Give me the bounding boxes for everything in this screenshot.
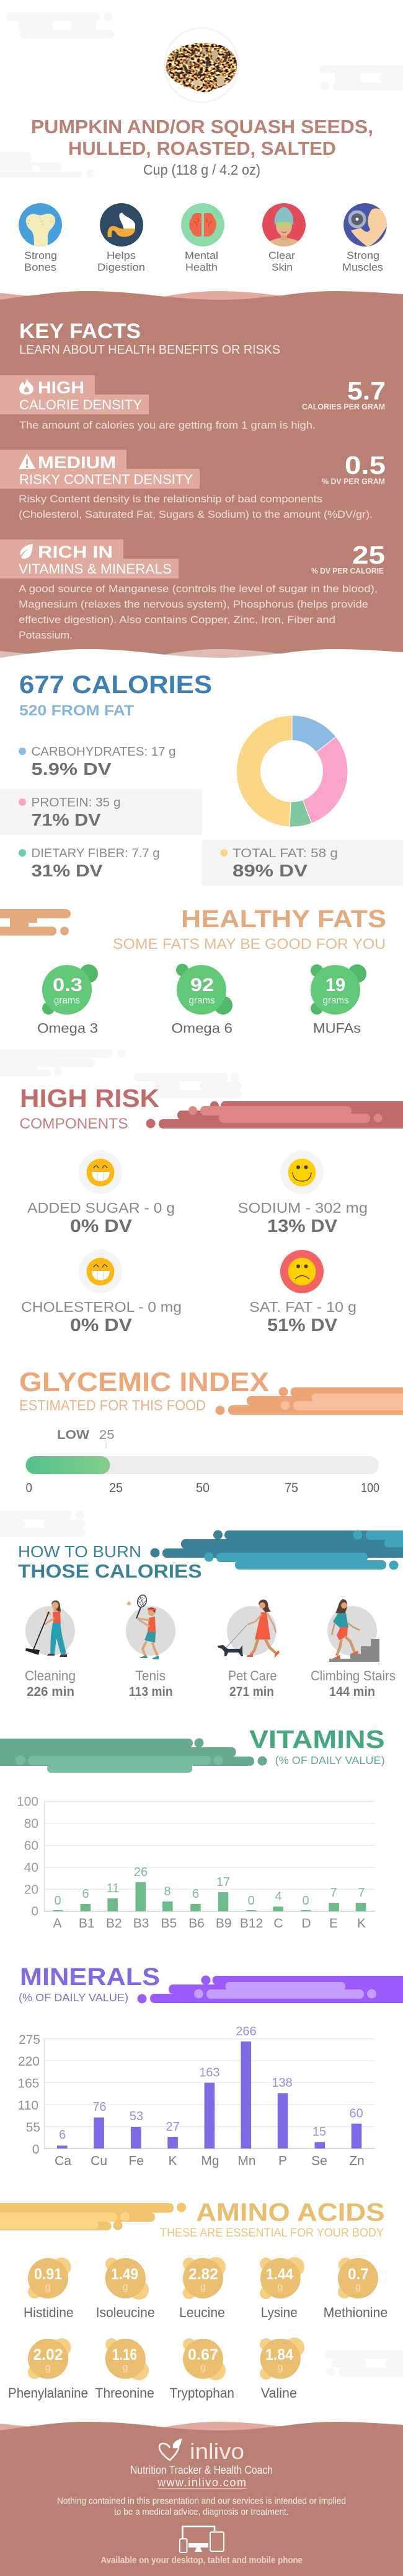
bar chart: minerals: 76	[92, 2100, 107, 2114]
bar chart: vitamins: 7	[358, 1886, 365, 1900]
bar chart: vitamins: B2	[106, 1916, 122, 1931]
stat: omega 6: Omega 6	[171, 1021, 232, 1036]
bar chart: minerals: Mn	[237, 2154, 256, 2168]
bar chart: vitamins: 0	[302, 1894, 309, 1908]
heading: how to burn those calories: THOSE CALORIES	[18, 1560, 202, 1582]
banner shape: purple	[138, 1976, 403, 2003]
heading: minerals	[19, 1963, 160, 2004]
tagline: Nutrition Tracker & Health Coach	[130, 2464, 273, 2476]
label: strong muscles: Muscles	[342, 261, 383, 273]
amino: valine: g	[278, 2362, 283, 2373]
bar chart: vitamins: 0	[54, 1894, 61, 1908]
bar chart: minerals: 163	[199, 2066, 220, 2080]
bar chart: minerals: K	[169, 2154, 177, 2168]
fact: high calorie density: HIGH	[38, 378, 84, 397]
food photo: seeds in ring	[162, 28, 241, 102]
serving size: Cup (118 g / 4.2 oz)	[143, 162, 260, 178]
disclaimer: Nothing contained in this presentation and our services is intended or implied	[57, 2497, 346, 2507]
icon: flame	[19, 378, 33, 395]
fact: medium risky content density: Risky Content density is the relationship of bad components	[19, 494, 322, 505]
heading: healthy fats: HEALTHY FATS	[181, 906, 386, 933]
gauge axis labels: 75	[285, 1481, 298, 1495]
item: sodium: 13% DV	[267, 1216, 338, 1236]
bar chart: vitamins: 80	[24, 1817, 38, 1831]
bar chart: vitamins: 4	[275, 1890, 282, 1903]
bar chart: minerals: Ca	[55, 2154, 71, 2168]
fact: high calorie density	[0, 375, 386, 431]
label: strong muscles: Strong	[347, 250, 379, 261]
bar chart: minerals: Cu	[91, 2154, 107, 2168]
legend: protein: 71% DV	[31, 810, 101, 829]
heading: key facts: KEY FACTS	[19, 320, 141, 343]
panel: high risk components	[20, 1084, 403, 1335]
bar chart: vitamins: K	[357, 1916, 366, 1931]
amino: isoleucine: 1.49	[111, 2266, 138, 2283]
heading: how to burn those calories	[18, 1542, 202, 1582]
label: strong muscles	[342, 250, 383, 273]
fact: rich in vitamins and minerals: Potassium.	[19, 630, 73, 641]
bar chart: vitamins: 100	[17, 1795, 38, 1809]
stat: mufas	[311, 964, 366, 1036]
panel: footer	[0, 2422, 403, 2576]
legend: total fat	[221, 847, 338, 880]
bar chart: vitamins: 26	[134, 1866, 148, 1879]
amino: tryptophan: Tryptophan	[170, 2385, 234, 2401]
panel: glycemic index	[19, 1367, 403, 1495]
bar chart: vitamins: 11	[107, 1882, 119, 1895]
figure: tennis player	[127, 1594, 159, 1659]
figure: woman walking dog	[218, 1599, 280, 1658]
heading: amino acids: AMINO ACIDS	[196, 2198, 385, 2227]
panel: how to burn those calories	[18, 1530, 403, 1699]
amino: methionine	[324, 2258, 388, 2320]
heading: 677 calories: 677 CALORIES	[19, 670, 212, 699]
banner shape: red	[146, 1101, 403, 1129]
fact: medium risky content density: (Cholesterol, Saturated Fat, Sugars & Sodium) to the amount (%DV/gr).	[19, 509, 373, 520]
title	[31, 116, 373, 159]
label: strong bones	[24, 250, 57, 273]
heading: key facts	[19, 320, 280, 357]
icon: leaf	[20, 544, 33, 559]
amino: phenylalanine	[8, 2338, 88, 2401]
legend: carbohydrates	[19, 745, 176, 779]
fact: rich in vitamins and minerals: VITAMINS & MINERALS	[19, 561, 172, 577]
activity: tennis: Tenis	[135, 1668, 166, 1683]
bar chart: vitamins: 8	[164, 1885, 171, 1898]
bar chart: minerals: Mg	[201, 2154, 219, 2168]
item: cholesterol: CHOLESTEROL - 0 mg	[21, 1299, 182, 1315]
amino: histidine: 0.91	[34, 2266, 62, 2283]
heading: healthy fats: SOME FATS MAY BE GOOD FOR YOU	[113, 936, 386, 953]
bar chart: vitamins: 40	[24, 1861, 38, 1875]
bar chart: vitamins: 60	[24, 1839, 38, 1853]
item: saturated fat	[249, 1250, 356, 1335]
icon: devices	[180, 2526, 224, 2552]
gauge marker: low 25: 25	[99, 1428, 114, 1442]
amino: isoleucine: g	[123, 2282, 128, 2292]
banner shape: orange	[0, 909, 71, 935]
bar chart: minerals: 138	[272, 2076, 293, 2090]
legend: carbohydrates: CARBOHYDRATES: 17 g	[31, 745, 176, 759]
heading: glycemic index: GLYCEMIC INDEX	[19, 1367, 269, 1397]
bar chart: vitamins: B1	[79, 1916, 95, 1931]
amino: histidine	[24, 2258, 74, 2320]
label: mental health: Mental	[185, 250, 218, 261]
logo: inlivo	[159, 2438, 244, 2464]
gauge axis labels: 100	[361, 1481, 379, 1495]
bar chart: minerals: 266	[236, 2025, 257, 2038]
gauge marker: low 25: LOW	[57, 1428, 89, 1442]
bar chart: vitamins: 0	[247, 1894, 255, 1908]
logo: inlivo: inlivo	[190, 2438, 244, 2464]
bar chart: minerals: 60	[349, 2107, 363, 2121]
bar chart: minerals: 0	[32, 2142, 40, 2157]
amino: histidine: Histidine	[24, 2305, 74, 2320]
item: saturated fat: 51% DV	[267, 1316, 338, 1335]
panel: vitamins	[0, 1725, 385, 1931]
gauge axis labels: 25	[109, 1481, 123, 1495]
gauge axis labels: 0	[26, 1481, 32, 1495]
amino: methionine: g	[355, 2282, 361, 2292]
heading: glycemic index: ESTIMATED FOR THIS FOOD	[19, 1397, 206, 1414]
activity: cleaning: 226 min	[27, 1685, 74, 1699]
availability note: Available on your desktop, tablet and mobile phone	[100, 2555, 303, 2565]
amino: tryptophan	[170, 2338, 234, 2401]
label: strong bones: Bones	[24, 261, 56, 273]
bar chart: vitamins: 6	[82, 1887, 89, 1901]
panel: healthy fats	[0, 906, 386, 1036]
fact: medium risky content density: % DV PER GRAM	[322, 477, 385, 486]
activity: tennis	[126, 1594, 175, 1699]
fact: rich in vitamins and minerals: % DV PER CALORIE	[311, 566, 384, 575]
amino: leucine: 2.82	[188, 2266, 218, 2283]
stat: omega 3: 0.3	[53, 975, 82, 995]
benefit icons row	[19, 203, 388, 273]
label: clear skin: Skin	[272, 261, 293, 273]
bar chart: minerals: 220	[18, 2054, 40, 2069]
heading: high risk	[20, 1084, 159, 1132]
heading: minerals: MINERALS	[20, 1963, 160, 1991]
label: strong bones: Strong	[24, 250, 57, 261]
heading: healthy fats	[113, 906, 386, 953]
activity: pet care: 271 min	[229, 1685, 274, 1699]
fact: medium risky content density: RISKY CONTENT DENSITY	[19, 472, 193, 487]
bar chart: vitamins: D	[301, 1916, 311, 1931]
heading: amino acids	[160, 2198, 385, 2240]
banner shape: teal	[150, 1530, 403, 1570]
amino: histidine: g	[45, 2282, 51, 2292]
amino: valine: Valine	[261, 2385, 297, 2401]
icon: clear skin	[262, 203, 306, 247]
icon: strong muscles	[343, 203, 388, 247]
banner shape: yellow	[0, 2203, 186, 2230]
gauge axis labels: 50	[196, 1481, 210, 1495]
fact: rich in vitamins and minerals	[0, 539, 385, 641]
bar chart: vitamins: B5	[161, 1916, 177, 1931]
fact: high calorie density: 5.7	[347, 377, 386, 405]
amino: methionine: 0.7	[348, 2266, 369, 2283]
item: added sugar: 0% DV	[70, 1216, 133, 1236]
heading: glycemic index	[19, 1367, 269, 1414]
stat: omega 3	[37, 964, 98, 1036]
bar chart: vitamins: 6	[192, 1887, 199, 1901]
fact: high calorie density: The amount of calories you are getting from 1 gram is high.	[19, 420, 316, 431]
stat: omega 3: Omega 3	[37, 1021, 98, 1036]
activity: cleaning	[25, 1600, 76, 1699]
heading: vitamins: (% OF DAILY VALUE)	[275, 1754, 385, 1766]
icon: warning triangle	[19, 453, 35, 469]
legend: protein	[19, 796, 120, 829]
legend: total fat: 89% DV	[232, 861, 308, 880]
item: saturated fat: SAT. FAT - 10 g	[249, 1299, 356, 1315]
heading: amino acids: THESE ARE ESSENTIAL FOR YOUR BODY	[160, 2227, 384, 2240]
legend: total fat: TOTAL FAT: 58 g	[232, 847, 338, 860]
amino: tryptophan: 0.67	[188, 2346, 218, 2364]
figure: woman on stairs	[329, 1599, 379, 1662]
item: added sugar	[27, 1151, 175, 1236]
amino: lysine: 1.44	[266, 2266, 293, 2283]
activity: pet care: Pet Care	[228, 1668, 277, 1683]
icon: mental health	[181, 203, 224, 247]
item: sodium	[238, 1151, 368, 1236]
label: mental health: Health	[185, 261, 218, 273]
bar chart: minerals: 110	[18, 2098, 38, 2113]
amino: leucine: Leucine	[179, 2305, 225, 2320]
gauge marker: low 25	[57, 1428, 114, 1449]
heading: 677 calories: 520 FROM FAT	[19, 702, 134, 719]
item: cholesterol	[21, 1250, 182, 1335]
label: clear skin: Clear	[268, 250, 295, 261]
amino: lysine	[260, 2257, 304, 2320]
bar chart: vitamins: 7	[330, 1886, 337, 1900]
item: added sugar: ADDED SUGAR - 0 g	[27, 1200, 175, 1216]
label: digestion	[97, 250, 145, 273]
amino: threonine	[95, 2338, 154, 2401]
title: PUMPKIN AND/OR SQUASH SEEDS,	[31, 116, 373, 138]
bar chart: minerals: 165	[17, 2077, 40, 2091]
fact: rich in vitamins and minerals: RICH IN	[38, 543, 113, 562]
item: cholesterol: 0% DV	[70, 1316, 133, 1335]
stat: mufas: 19	[326, 975, 345, 995]
label: digestion: Digestion	[97, 261, 145, 273]
bar chart: vitamins: B6	[188, 1916, 205, 1931]
website link: www.inlivo.com	[157, 2476, 246, 2489]
amino: threonine: 1.16	[112, 2346, 137, 2364]
title: HULLED, ROASTED, SALTED	[68, 138, 336, 159]
legend: protein: PROTEIN: 35 g	[31, 796, 120, 810]
heading: vitamins	[249, 1725, 385, 1766]
amino: threonine: g	[123, 2362, 128, 2373]
amino: valine	[260, 2338, 304, 2401]
fact: rich in vitamins and minerals: A good source of Manganese (controls the level of sugar in the blood),	[19, 583, 378, 595]
disclaimer: to be a medical advice, diagnosis or treatment.	[114, 2507, 289, 2517]
amino: phenylalanine: Phenylalanine	[8, 2385, 88, 2401]
bar chart: vitamins: A	[53, 1916, 62, 1931]
bar chart: vitamins: B3	[133, 1916, 149, 1931]
gauge axis labels	[26, 1481, 379, 1495]
fact: medium risky content density	[0, 450, 386, 520]
label: digestion: Helps	[107, 250, 136, 261]
figure: person sweeping	[25, 1600, 67, 1657]
bar chart: minerals	[17, 2025, 375, 2168]
activity: pet care	[218, 1599, 280, 1699]
amino: threonine: Threonine	[95, 2385, 154, 2401]
heading: vitamins: VITAMINS	[249, 1725, 385, 1753]
stat: omega 6: grams	[188, 995, 215, 1006]
amino: phenylalanine: g	[45, 2362, 51, 2373]
bar chart: minerals: 55	[26, 2121, 40, 2135]
stat: omega 3: grams	[54, 995, 80, 1006]
bar chart: minerals: 15	[312, 2125, 326, 2139]
icon: digestion	[100, 203, 143, 247]
stat: mufas: MUFAs	[313, 1021, 361, 1036]
gauge bar	[26, 1456, 379, 1474]
bar chart: vitamins: 20	[24, 1883, 38, 1897]
bar chart: vitamins: 0	[31, 1905, 38, 1919]
activity: tennis: 113 min	[129, 1685, 173, 1699]
fact: medium risky content density: 0.5	[345, 451, 386, 479]
stat: omega 6	[171, 964, 232, 1036]
heading: high risk: HIGH RISK	[20, 1084, 159, 1112]
bar chart: vitamins: B9	[216, 1916, 232, 1931]
bar chart: vitamins: E	[329, 1916, 338, 1931]
amino: leucine	[179, 2257, 226, 2320]
activity: climbing stairs: Climbing Stairs	[311, 1668, 396, 1683]
bar chart: minerals: Se	[311, 2154, 327, 2168]
bar chart: vitamins: C	[273, 1916, 283, 1931]
heading: how to burn those calories: HOW TO BURN	[18, 1542, 141, 1561]
activity: cleaning: Cleaning	[25, 1668, 76, 1683]
label: clear skin	[268, 250, 295, 273]
fact: rich in vitamins and minerals: Magnesium (relaxes the nervous system), Phosphorus (helps provide	[19, 599, 368, 610]
bar chart: minerals: 6	[59, 2128, 66, 2142]
icon: strong bones	[19, 203, 62, 247]
heading: minerals: (% OF DAILY VALUE)	[19, 1991, 128, 2004]
amino: phenylalanine: 2.02	[33, 2346, 63, 2364]
legend: carbohydrates: 5.9% DV	[31, 759, 112, 779]
panel: key facts	[0, 291, 403, 711]
legend: dietary fiber: DIETARY FIBER: 7.7 g	[31, 847, 160, 860]
amino: isoleucine: Isoleucine	[96, 2305, 155, 2320]
heading: key facts: LEARN ABOUT HEALTH BENEFITS OR RISKS	[19, 343, 280, 357]
donut chart: macronutrients	[236, 715, 348, 827]
panel: minerals	[17, 1963, 403, 2168]
bar chart: vitamins: B12	[240, 1916, 263, 1931]
stat: omega 6: 92	[190, 975, 214, 995]
bar chart: minerals: 53	[130, 2110, 143, 2123]
fact: rich in vitamins and minerals: 25	[352, 541, 385, 569]
fact: medium risky content density: MEDIUM	[38, 453, 116, 472]
bar chart: minerals: P	[278, 2154, 287, 2168]
activity: climbing stairs	[311, 1599, 396, 1699]
bar chart: minerals: Zn	[349, 2154, 365, 2168]
bar chart: minerals: 275	[19, 2033, 40, 2047]
heading: high risk: COMPONENTS	[20, 1116, 128, 1132]
bar chart: vitamins: 17	[216, 1875, 230, 1889]
bar chart: minerals: Fe	[128, 2154, 144, 2168]
disclaimer	[57, 2497, 346, 2517]
amino: lysine: g	[278, 2282, 283, 2292]
stat: mufas: grams	[322, 995, 348, 1006]
amino: valine: 1.84	[265, 2346, 293, 2364]
panel: calories	[0, 670, 403, 886]
item: sodium: SODIUM - 302 mg	[238, 1200, 368, 1216]
label: mental health	[185, 250, 218, 273]
amino: tryptophan: g	[200, 2362, 206, 2373]
amino: isoleucine	[96, 2258, 155, 2320]
legend: dietary fiber: 31% DV	[31, 861, 103, 880]
banner shape: green	[0, 1738, 267, 1773]
fact: high calorie density: CALORIE DENSITY	[19, 397, 142, 413]
panel: amino acids	[0, 2198, 388, 2401]
legend: dietary fiber	[19, 847, 160, 880]
heading: 677 calories	[19, 670, 212, 719]
fact: high calorie density: CALORIES PER GRAM	[302, 402, 385, 411]
activity: climbing stairs: 144 min	[329, 1685, 375, 1699]
amino: methionine: Methionine	[324, 2305, 388, 2320]
fact: rich in vitamins and minerals: effective digestion). Also contains Copper, Zinc, Iron, Fiber and	[19, 614, 335, 626]
bar chart: minerals: 27	[166, 2120, 180, 2134]
amino: lysine: Lysine	[261, 2305, 298, 2320]
banner shape: orange	[216, 1387, 403, 1415]
amino: leucine: g	[200, 2282, 206, 2292]
bar chart: vitamins	[17, 1795, 375, 1931]
